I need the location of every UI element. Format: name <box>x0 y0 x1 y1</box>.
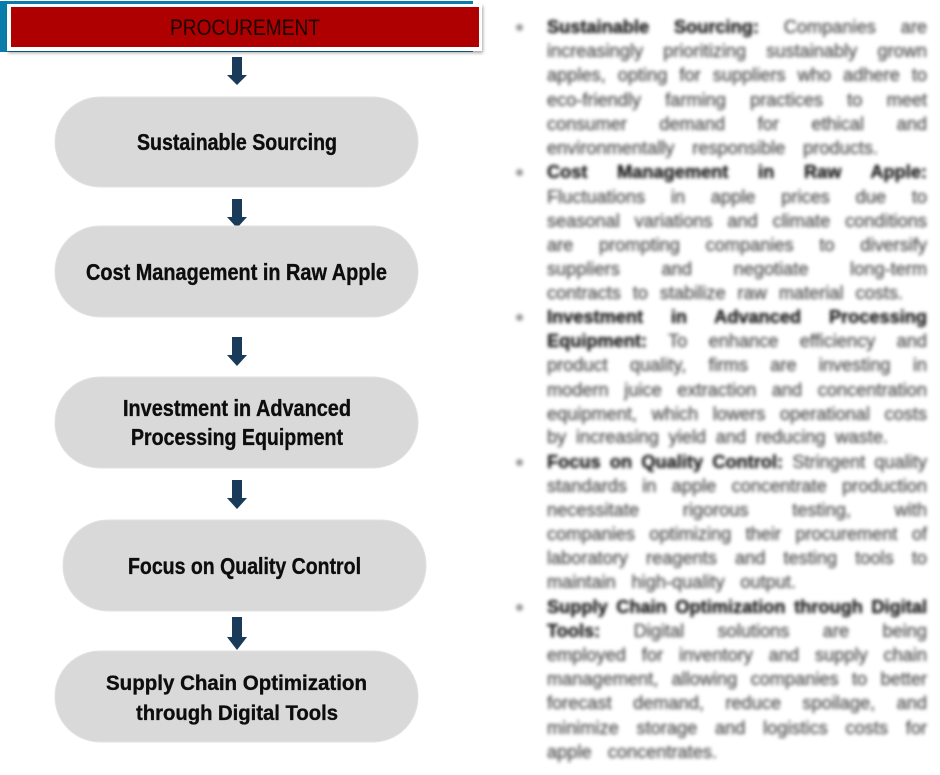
pill: advanced processing equipment <box>55 377 418 468</box>
bullet: advanced processing equipment: equipment, which lowers operational costs <box>547 404 927 424</box>
pill: quality control: Focus on Quality Control <box>128 553 361 579</box>
bullet: supply chain optimization: Tools: Digital solutions are being <box>547 621 927 641</box>
bullet: cost management: are prompting companies to diversify <box>547 235 927 255</box>
bullet: cost management: suppliers and negotiate long-term <box>547 259 927 279</box>
bullet: supply chain optimization: employed for inventory and supply chain <box>547 645 927 665</box>
pill: advanced processing equipment: Investment in Advanced <box>123 395 351 421</box>
bullet: supply chain optimization: minimize storage and logistics costs for <box>547 718 927 738</box>
pill: sustainable sourcing <box>55 97 418 187</box>
bullet: advanced processing equipment: Investment in Advanced Processing <box>547 307 927 327</box>
bullet: sustainable sourcing: environmentally responsible products. <box>547 138 878 158</box>
bullet: cost management: Fluctuations in apple prices due to <box>547 187 927 207</box>
bullet: sustainable sourcing: apples, opting for suppliers who adhere to <box>547 65 927 85</box>
pill: supply chain optimization <box>55 651 418 742</box>
bullet: sustainable sourcing: consumer demand for ethical and <box>547 114 927 134</box>
arrow 3 <box>227 337 247 366</box>
left flow diagram <box>0 1 485 742</box>
bullet: supply chain optimization <box>514 596 929 764</box>
bullet: supply chain optimization: Supply Chain Optimization through Digital <box>547 597 927 617</box>
bullet: quality control: necessitate rigorous testing, with <box>547 500 927 520</box>
bullet: quality control: standards in apple concentrate production <box>547 476 927 496</box>
pill: cost management: Cost Management in Raw Apple <box>86 259 387 285</box>
bullet: cost management: seasonal variations and climate conditions <box>547 211 927 231</box>
bullet: advanced processing equipment: by increasing yield and reducing waste. <box>547 427 888 447</box>
arrow 2 <box>227 199 247 228</box>
bullet: sustainable sourcing: Sustainable Sourcing: Companies are <box>547 17 927 37</box>
bullet: cost management: Cost Management in Raw Apple: <box>547 162 927 182</box>
arrow 4 <box>227 480 247 509</box>
bullet: sustainable sourcing <box>514 16 929 160</box>
bullet: advanced processing equipment: modern juice extraction and concentration <box>547 380 927 400</box>
bullet: quality control: maintain high-quality output. <box>547 572 796 592</box>
bullet: supply chain optimization: forecast demand, reduce spoilage, and <box>547 693 927 713</box>
arrow 5 <box>227 617 247 650</box>
arrow 1 <box>227 57 247 85</box>
bullet: advanced processing equipment <box>514 306 929 450</box>
bullet: quality control <box>514 452 930 595</box>
pill: supply chain optimization: Supply Chain Optimization <box>106 672 367 695</box>
bullet: supply chain optimization: management, allowing companies to better <box>547 669 927 689</box>
bullet: cost management: contracts to stabilize raw material costs. <box>547 283 903 303</box>
bullet: sustainable sourcing: increasingly prioritizing sustainably grown <box>547 41 927 61</box>
bullet: advanced processing equipment: Equipment: To enhance efficiency and <box>547 331 927 351</box>
bullet: quality control: Focus on Quality Control: Stringent quality <box>547 452 927 472</box>
pill: quality control <box>63 520 426 611</box>
pill: sustainable sourcing: Sustainable Sourcing <box>137 129 337 155</box>
header: procurement <box>0 1 482 52</box>
bullet: supply chain optimization: apple concentrates. <box>547 742 717 762</box>
bullet: quality control: companies optimizing their procurement of <box>547 524 927 544</box>
bullet: quality control: laboratory reagents and testing tools to <box>547 548 927 568</box>
header: procurement: PROCUREMENT <box>170 15 320 40</box>
pill: cost management <box>55 226 418 317</box>
bullet: sustainable sourcing: eco-friendly farming practices to meet <box>547 90 927 110</box>
bullet: cost management <box>514 162 929 303</box>
pill: supply chain optimization: through Digital Tools <box>136 702 338 725</box>
bullet: advanced processing equipment: product quality, firms are investing in <box>547 355 927 375</box>
pill: advanced processing equipment: Processing Equipment <box>131 424 343 450</box>
